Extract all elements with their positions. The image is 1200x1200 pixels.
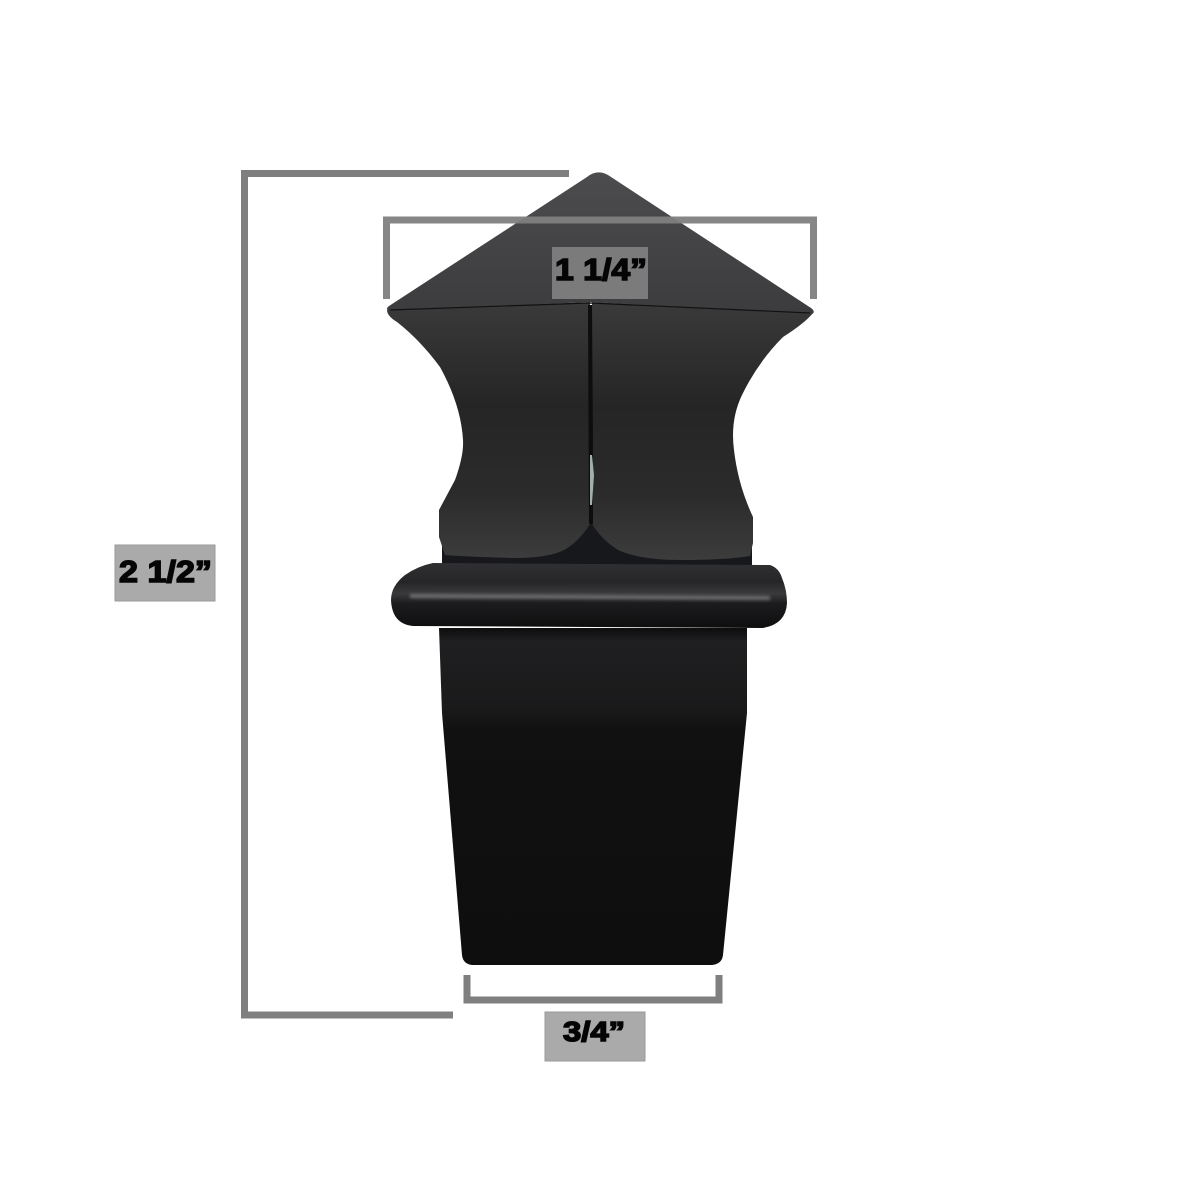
label: base width 3/4: 3/4” <box>563 1016 625 1047</box>
cap waist: left panel <box>387 302 590 558</box>
label: height 2 1/2 <box>115 545 215 601</box>
label: top width 1 1/4 <box>552 247 648 299</box>
cap body: tapered base <box>439 628 747 965</box>
label: base width 3/4 <box>545 1012 645 1061</box>
collar highlight <box>410 594 770 600</box>
seam glint <box>590 455 594 505</box>
dimension bracket: base width <box>467 975 719 1000</box>
cap seam <box>588 305 593 524</box>
cap waist: right panel <box>592 302 813 560</box>
label: height 2 1/2: 2 1/2” <box>119 554 212 589</box>
dimension bracket: top width <box>386 220 814 299</box>
cap neck <box>442 520 752 572</box>
cap collar <box>391 563 787 628</box>
post cap product <box>387 172 814 965</box>
label: top width 1 1/4: 1 1/4” <box>555 252 647 287</box>
cap pyramid top <box>387 172 814 314</box>
dimension bracket: height <box>244 174 569 1015</box>
pyramid lower edge <box>390 303 810 313</box>
